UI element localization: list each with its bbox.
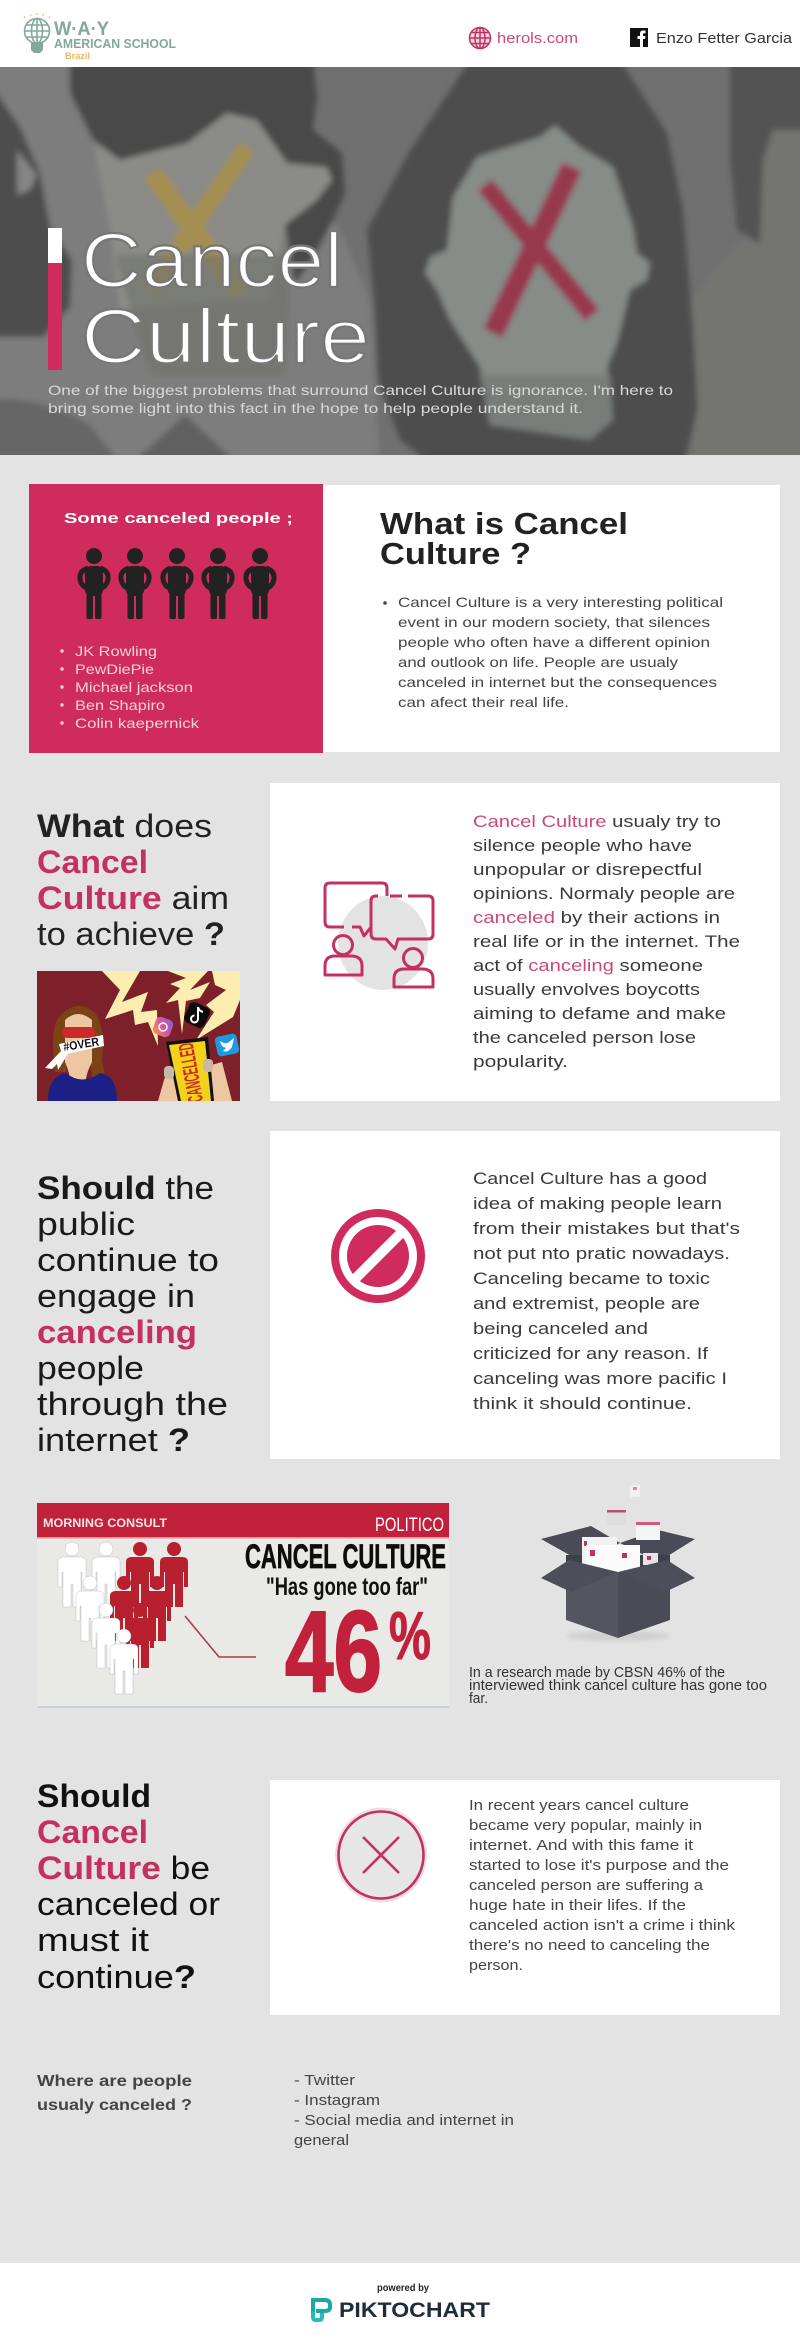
heading: should the public continue to engage in canceling: Should the <box>37 1170 214 1206</box>
explanatory text: Cancel Culture has a good <box>473 1169 707 1188</box>
survey caption <box>469 1665 767 1707</box>
definition text: Cancel Culture is a very interesting political <box>398 594 723 610</box>
panel: should canceling continue <box>270 1131 780 1459</box>
panel: some canceled people <box>29 484 323 753</box>
heading: should cancel culture be canceled or continue: Culture be <box>37 1850 210 1886</box>
definition text: can afect their real life. <box>398 694 569 710</box>
explanatory text: from their mistakes but that's <box>473 1219 740 1238</box>
question: where are people canceled: usualy canceled ? <box>37 2097 192 2114</box>
icon: facebook <box>630 28 648 47</box>
intro text: One of the biggest problems that surround Cancel Culture is ignorance. I'm here to <box>48 382 673 398</box>
list of platforms: general <box>294 2133 349 2149</box>
icon: conversation between two people <box>325 883 433 990</box>
explanatory text: usually envolves boycotts <box>473 980 700 999</box>
panel: what cancel culture aims to do <box>270 783 780 1101</box>
list of platforms <box>294 2073 514 2149</box>
explanatory text: canceled person are suffering a <box>469 1878 704 1894</box>
heading: should the public continue to engage in canceling: through the <box>37 1386 228 1422</box>
explanatory text: act of canceling someone <box>473 956 703 975</box>
explanatory text: idea of making people learn <box>473 1194 722 1213</box>
icon: cross in circle <box>335 1808 427 1902</box>
panel: what is cancel culture <box>29 484 780 753</box>
footer: powered by Piktochart <box>0 2263 800 2342</box>
title: Culture <box>81 294 370 380</box>
panel heading: Some canceled people ; <box>64 511 293 527</box>
title accent bar <box>48 228 62 370</box>
explanatory text <box>473 1169 740 1413</box>
definition text: people who often have a different opinion <box>398 634 710 650</box>
header bar <box>0 0 800 67</box>
title <box>81 218 370 380</box>
footer: powered by Piktochart: PIKTOCHART <box>339 2299 490 2322</box>
list of names: Colin kaepernick <box>75 715 200 731</box>
explanatory text: being canceled and <box>473 1319 648 1338</box>
explanatory text: not put nto pratic nowadays. <box>473 1244 730 1263</box>
intro text: bring some light into this fact in the hope to help people understand it. <box>48 400 583 416</box>
explanatory text: there's no need to canceling the <box>469 1938 710 1954</box>
heading <box>380 506 628 571</box>
explanatory text: internet. And with this fame it <box>469 1838 693 1854</box>
heading: what does cancel culture aim to achieve: Culture aim <box>37 880 229 916</box>
chart image: Politico Morning Consult 46 percent: CANCEL CULTURE <box>245 1538 446 1576</box>
illustration: woman silenced and phone showing cancelled: CANCELLED <box>175 1041 208 1104</box>
footer: powered by Piktochart: powered by <box>377 2282 429 2294</box>
explanatory text: Canceling became to toxic <box>473 1269 711 1288</box>
explanatory text: silence people who have <box>473 836 692 855</box>
chart image: Politico Morning Consult 46 percent: POLITICO <box>375 1515 444 1536</box>
list of platforms: - Instagram <box>294 2093 380 2109</box>
list of platforms: - Social media and internet in <box>294 2113 514 2129</box>
definition text: event in our modern society, that silences <box>398 614 710 630</box>
illustration: open box with papers <box>541 1485 695 1641</box>
heading: should the public continue to engage in canceling: canceling <box>37 1314 197 1350</box>
survey caption: In a research made by CBSN 46% of the <box>469 1665 725 1681</box>
explanatory text <box>469 1798 736 1974</box>
author name: Enzo Fetter Garcia <box>656 30 793 47</box>
definition text: canceled in internet but the consequences <box>398 674 717 690</box>
heading: should cancel culture be canceled or continue: Should <box>37 1778 151 1814</box>
explanatory text <box>473 812 740 1071</box>
illustration: woman silenced and phone showing cancelled <box>37 971 240 1104</box>
logo: WAY American School Brazil <box>24 13 176 62</box>
heading: what does cancel culture aim to achieve: What does <box>37 808 212 844</box>
heading: what does cancel culture aim to achieve: to achieve ? <box>37 916 225 952</box>
explanatory text: aiming to defame and make <box>473 1004 726 1023</box>
definition text: and outlook on life. People are usualy <box>398 654 678 670</box>
heading: what does cancel culture aim to achieve <box>37 808 229 952</box>
intro text <box>48 382 673 416</box>
survey caption: far. <box>469 1691 488 1707</box>
heading: should cancel culture be canceled or continue: must it <box>37 1922 149 1958</box>
heading: what does cancel culture aim to achieve: Cancel <box>37 844 148 880</box>
explanatory text: Cancel Culture usualy try to <box>473 812 721 831</box>
illustration: woman silenced and phone showing cancelled: #OVER <box>62 1034 100 1054</box>
question: where are people canceled <box>37 2073 192 2114</box>
question: where are people canceled: Where are people <box>37 2073 192 2090</box>
panel: should it continue <box>270 1780 780 2015</box>
heading: should cancel culture be canceled or continue: Cancel <box>37 1814 148 1850</box>
explanatory text: canceling was more pacific I <box>473 1369 727 1388</box>
explanatory text: the canceled person lose <box>473 1028 696 1047</box>
logo: WAY American School Brazil: Brazil <box>65 51 90 62</box>
heading: should cancel culture be canceled or continue: canceled or <box>37 1886 220 1922</box>
icon: row of people <box>80 548 274 619</box>
chart image: Politico Morning Consult 46 percent: 46 <box>285 1588 382 1716</box>
explanatory text: real life or in the internet. The <box>473 932 740 951</box>
chart image: Politico Morning Consult 46 percent <box>37 1503 449 1716</box>
list of names: Ben Shapiro <box>75 697 165 713</box>
heading: should the public continue to engage in canceling: public <box>37 1206 135 1242</box>
heading: Culture ? <box>380 536 531 571</box>
pictogram of respondents <box>58 1542 188 1694</box>
title: Cancel <box>81 218 343 304</box>
heading: should the public continue to engage in canceling: internet ? <box>37 1422 190 1458</box>
explanatory text: popularity. <box>473 1052 568 1071</box>
heading: should the public continue to engage in canceling: engage in <box>37 1278 195 1314</box>
explanatory text: started to lose it's purpose and the <box>469 1858 729 1874</box>
list of names: JK Rowling <box>75 643 157 659</box>
website link: herols.com <box>497 30 578 47</box>
heading: should cancel culture be canceled or continue: continue ? <box>37 1959 196 1995</box>
hero banner <box>0 60 800 470</box>
heading: should cancel culture be canceled or continue <box>37 1778 220 1995</box>
heading: should the public continue to engage in canceling <box>37 1170 228 1458</box>
explanatory text: person. <box>469 1958 523 1974</box>
heading: should the public continue to engage in canceling: continue to <box>37 1242 219 1278</box>
explanatory text: criticized for any reason. If <box>473 1344 708 1363</box>
explanatory text: huge hate in their lifes. If the <box>469 1898 686 1914</box>
list of names: Michael jackson <box>75 679 193 695</box>
explanatory text: canceled by their actions in <box>473 908 720 927</box>
chart image: Politico Morning Consult 46 percent: "Has gone too far" <box>266 1573 428 1601</box>
icon: globe <box>470 28 490 48</box>
explanatory text: think it should continue. <box>473 1394 692 1413</box>
heading: What is Cancel <box>380 506 628 541</box>
list of platforms: - Twitter <box>294 2073 355 2089</box>
explanatory text: unpopular or disrepectful <box>473 860 702 879</box>
explanatory text: In recent years cancel culture <box>469 1798 689 1814</box>
list of names <box>60 643 200 731</box>
icon: Piktochart logo <box>313 2300 330 2320</box>
survey caption: interviewed think cancel culture has gone too <box>469 1678 767 1694</box>
explanatory text: opinions. Normaly people are <box>473 884 735 903</box>
heading: should the public continue to engage in canceling: people <box>37 1350 144 1386</box>
logo: WAY American School Brazil: AMERICAN SCHOOL <box>54 36 176 51</box>
icon: prohibition sign <box>335 1213 421 1299</box>
definition text <box>383 594 723 710</box>
list of names: PewDiePie <box>75 661 154 677</box>
chart image: Politico Morning Consult 46 percent: % <box>389 1598 431 1674</box>
explanatory text: canceled action isn't a crime i think <box>469 1918 736 1934</box>
explanatory text: became very popular, mainly in <box>469 1818 702 1834</box>
explanatory text: and extremist, people are <box>473 1294 700 1313</box>
chart image: Politico Morning Consult 46 percent: MORNING CONSULT <box>43 1516 168 1530</box>
hero photo <box>0 60 800 470</box>
logo: WAY American School Brazil: W·A·Y <box>54 19 109 40</box>
